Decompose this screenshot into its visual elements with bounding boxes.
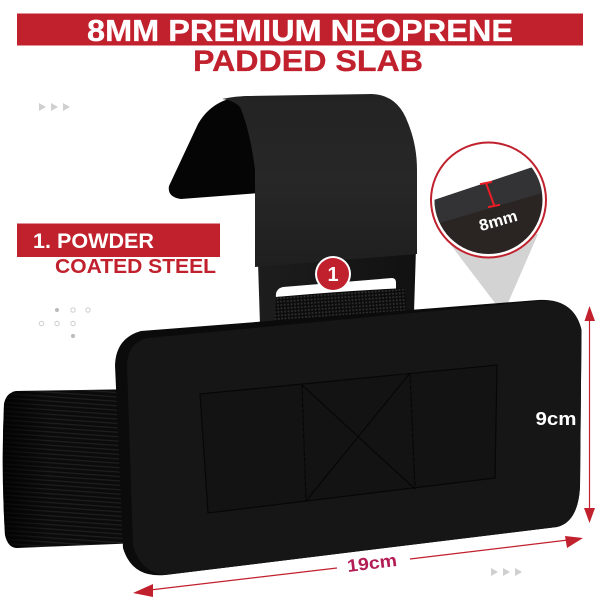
badge 1: [315, 256, 351, 292]
label: powder coated steel: COATED STEEL: [55, 255, 216, 278]
magnifier callout: 8mm: [477, 208, 520, 235]
label: powder coated steel: [17, 224, 220, 278]
arrow: 19cm width: [133, 536, 583, 597]
title banner: 8MM PREMIUM NEOPRENE: [87, 14, 513, 48]
slab face: [127, 301, 582, 575]
thickness marker: [481, 182, 499, 207]
hook: steel plate: [258, 248, 416, 325]
magnifier callout: [430, 142, 547, 258]
hook: back flap: [169, 96, 300, 199]
badge 1: 1: [327, 264, 339, 286]
slab: [115, 300, 582, 575]
arrow: 9cm height: [584, 306, 595, 523]
stitched panel: [200, 365, 497, 513]
decorative arrows top left: [39, 103, 70, 111]
slab edge: [115, 300, 582, 575]
decorative dots: [39, 308, 90, 338]
dimension: 9cm: 9cm: [536, 409, 576, 429]
hook: slot opening: [276, 278, 396, 297]
title banner: [17, 14, 583, 48]
hook: webbing through slot: [274, 288, 406, 322]
hook: front padded strap: [222, 94, 417, 267]
subtitle: PADDED SLAB: [193, 45, 423, 78]
label: powder coated steel: 1. POWDER: [33, 230, 154, 253]
strap left end: [3, 386, 360, 548]
decorative arrows bottom right: [491, 568, 522, 576]
callout cone: [447, 234, 538, 303]
dimension: 19cm: 19cm: [346, 550, 398, 576]
